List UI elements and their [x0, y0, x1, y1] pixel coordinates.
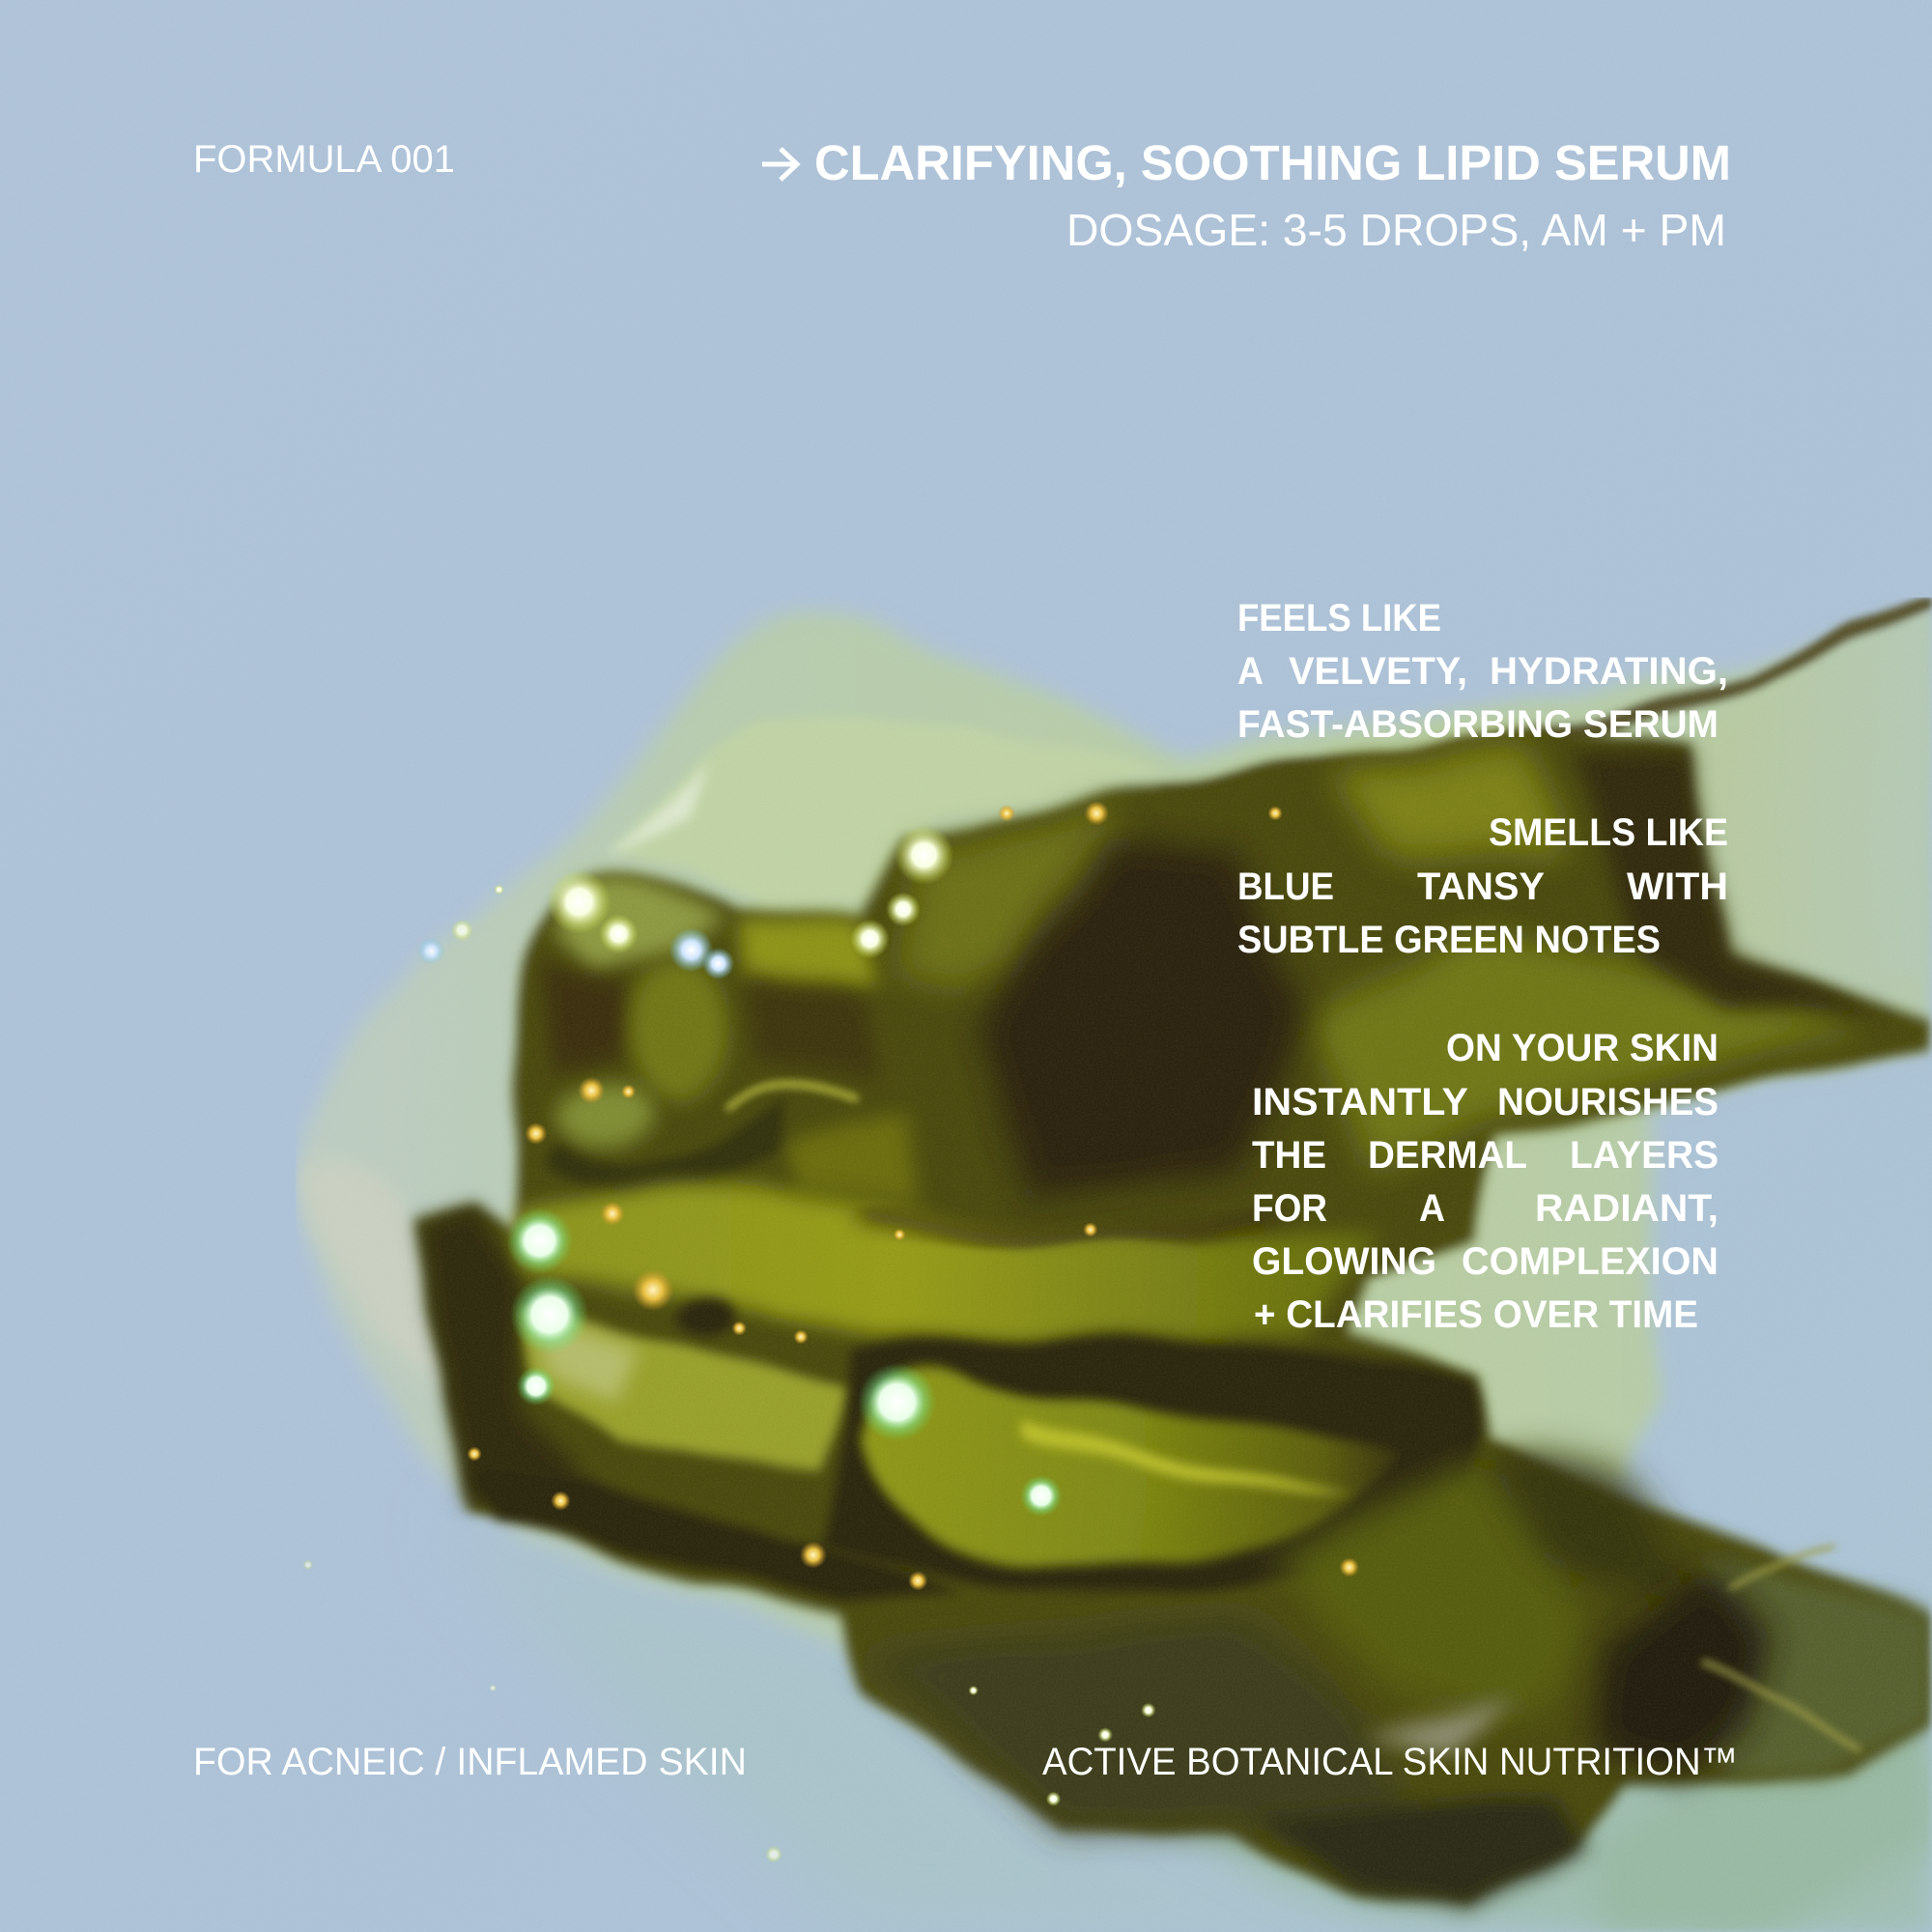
text block: on your skin: INSTANTLY [1252, 1081, 1468, 1123]
inner light: rounded capsule [860, 1369, 1399, 1563]
lower mass: dark grey left [863, 1614, 1417, 1830]
halo: pale left edge [301, 1164, 443, 1392]
wing: dark core [1589, 1565, 1775, 1775]
dark spot on band [678, 1293, 732, 1332]
text block: feels like [1237, 597, 1728, 746]
halo: lower blue-green oil pool [1060, 1602, 1932, 1932]
text block: smells like: BLUE [1237, 866, 1334, 908]
text block: smells like: SMELLS LIKE [1489, 811, 1728, 854]
text block: feels like: FEELS LIKE [1237, 597, 1441, 639]
label: formula number: FORMULA 001 [193, 138, 455, 181]
text block: smells like: TANSY [1417, 866, 1545, 908]
tube: dark ring band [1571, 752, 1886, 1016]
text block: on your skin [1252, 1027, 1719, 1336]
text block: on your skin: NOURISHES [1497, 1081, 1719, 1123]
halo: faint teal glow below the drop [443, 1516, 1479, 1932]
dropper tube: dark top edge [1158, 598, 1932, 801]
subheading: dosage: DOSAGE: 3-5 DROPS, AM + PM [1066, 205, 1726, 255]
inner light: left pale-green chamber [524, 1306, 853, 1472]
tube: lighter olive patches [899, 746, 1861, 1171]
dropper tube: pale right end [1688, 610, 1932, 985]
lower mass: central olive patch [1269, 1466, 1589, 1719]
text block: on your skin: LAYERS [1570, 1134, 1719, 1177]
halo: bottom right green glow [1589, 1713, 1932, 1932]
text block: on your skin: + CLARIFIES OVER TIME [1254, 1293, 1698, 1336]
dark arc around capsule [819, 1337, 1481, 1590]
lower mass: dark hump [1479, 1454, 1688, 1602]
text block: on your skin: A [1419, 1187, 1445, 1230]
heading: product name with arrow: CLARIFYING, SOOTHING LIPID SERUM [814, 135, 1731, 190]
bulb: details of rounded drop [542, 874, 918, 1202]
text block: on your skin: ON YOUR SKIN [1446, 1027, 1719, 1069]
text block: smells like [1237, 811, 1728, 961]
text block: on your skin: THE [1252, 1134, 1326, 1177]
lens: pale green crest above bulb [616, 721, 1171, 906]
tube: dark shadows [974, 838, 1306, 1195]
text block: feels like: VELVETY, [1289, 650, 1467, 693]
text block: feels like: FAST-ABSORBING SERUM [1237, 703, 1719, 746]
text block: on your skin: GLOWING [1252, 1240, 1436, 1283]
oil shapes group [296, 598, 1932, 1932]
footer: brand tagline: ACTIVE BOTANICAL SKIN NUTRITION™ [1042, 1741, 1738, 1783]
band: bright green fold [518, 1189, 1380, 1337]
text block: smells like: SUBTLE GREEN NOTES [1237, 919, 1661, 961]
text block: on your skin: DERMAL [1368, 1134, 1527, 1177]
halo streak [610, 757, 708, 856]
text block: on your skin: FOR [1252, 1187, 1327, 1230]
sparkles: specular highlights [303, 801, 1359, 1863]
left dark lobe [419, 1205, 579, 1503]
halo: pale translucent oil around the drop [296, 610, 1932, 1749]
footer: target skin type: FOR ACNEIC / INFLAMED SKIN [193, 1741, 747, 1783]
lower mass: dark bottom lobe [1257, 1799, 1589, 1913]
capsule streak [1023, 1417, 1355, 1497]
wing: right green [1700, 1552, 1932, 1775]
text block: smells like: WITH [1627, 866, 1728, 908]
text block: feels like: HYDRATING, [1490, 650, 1728, 693]
text block: on your skin: RADIANT, [1535, 1187, 1719, 1230]
dark stroke across band [863, 1213, 1282, 1236]
main mass: olive oil silhouette [412, 729, 1932, 1910]
text block: feels like: A [1237, 650, 1264, 693]
wing: leaf streaks [1700, 1547, 1861, 1749]
dark shade under chamber [469, 1466, 961, 1602]
text block: on your skin: COMPLEXION [1462, 1240, 1719, 1283]
lower mass: grey highlight [1368, 1698, 1516, 1749]
